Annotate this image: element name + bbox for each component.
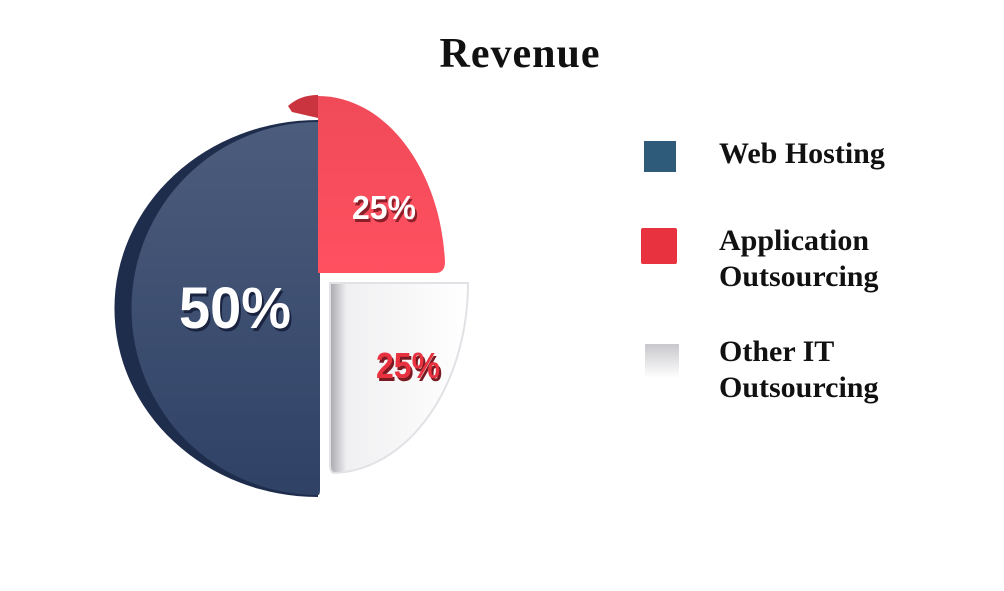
slice: red 25%: 25% <box>352 189 416 226</box>
swatch: red <box>641 228 677 264</box>
legend: Application Outsourcing <box>641 224 878 293</box>
slice: white 25% <box>330 283 468 473</box>
legend: Other IT Outsourcing: Other IT <box>719 335 834 368</box>
legend: Web Hosting <box>644 137 885 172</box>
slice: white 25%: 25% <box>376 345 440 386</box>
legend: Other IT Outsourcing: Outsourcing <box>719 371 878 404</box>
slice: navy 50%: 50% <box>181 279 293 344</box>
legend: Web Hosting: Web Hosting <box>719 137 885 170</box>
legend: Application Outsourcing: Outsourcing <box>719 260 878 293</box>
slice: navy 50% <box>114 120 320 497</box>
slice: red 25% <box>288 95 445 273</box>
slice: red 25%: 25% <box>354 192 418 229</box>
swatch: white gradient <box>645 344 679 378</box>
slice: white 25%: 25% <box>378 348 442 389</box>
slice: navy 50%: 50% <box>179 276 291 341</box>
title: Revenue <box>440 31 600 77</box>
swatch: navy <box>644 141 676 172</box>
legend: Other IT Outsourcing <box>645 335 878 404</box>
legend: Application Outsourcing: Application <box>719 224 869 257</box>
